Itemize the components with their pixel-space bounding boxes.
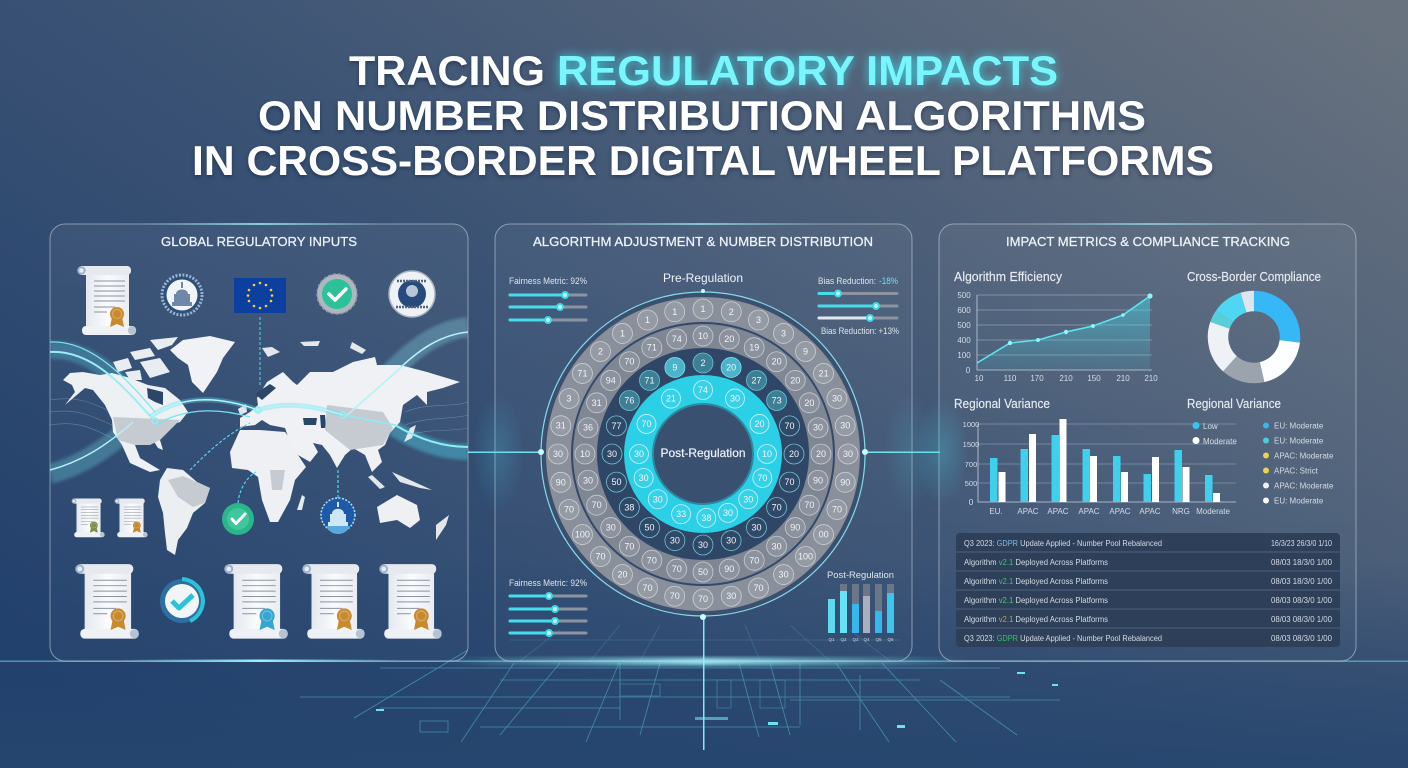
ring 1 numbers: 100 <box>575 530 590 540</box>
ring 2 numbers: 20 <box>772 357 782 367</box>
legend: regional variance: Regional Variance <box>1187 396 1281 411</box>
ring 2 numbers: 70 <box>672 564 682 574</box>
panel heading: GLOBAL REGULATORY INPUTS <box>161 234 357 249</box>
ring 4 numbers: 70 <box>757 473 767 483</box>
ring 2 numbers: 71 <box>647 343 657 353</box>
ring 3 numbers: 30 <box>726 536 736 546</box>
ring 3 numbers: 38 <box>624 502 634 512</box>
ring 3 numbers: 2 <box>700 358 706 368</box>
ring 4 numbers: 33 <box>676 509 686 519</box>
ring 3 numbers: 76 <box>624 396 634 406</box>
line chart: algorithm efficiency: 0 <box>966 366 971 375</box>
bar chart: regional variance: APAC <box>1047 507 1069 516</box>
icon: small scroll orange <box>115 499 148 537</box>
ring 1 numbers: 70 <box>753 583 763 593</box>
compliance log table: Algorithm v2.1 Deployed Across Platforms <box>964 576 1108 586</box>
ring 4 numbers: 21 <box>666 394 676 404</box>
icon: scroll with gold seal <box>77 266 136 335</box>
legend: low and moderate: Low <box>1203 422 1218 431</box>
ring 2 numbers: 10 <box>698 331 708 341</box>
panel heading: IMPACT METRICS & COMPLIANCE TRACKING <box>1006 234 1290 249</box>
sliders: fairness metric top: Fairness Metric: 92% <box>509 276 587 287</box>
ring 1 numbers: 2 <box>729 307 734 317</box>
ring 3 numbers: 50 <box>645 523 655 533</box>
compliance log table: Q3 2023: GDPR Update Applied - Number Pool Rebalanced <box>964 538 1162 548</box>
ring 1 numbers: 30 <box>553 449 563 459</box>
ring 4 numbers: 20 <box>755 419 765 429</box>
legend: regional variance <box>1187 396 1334 506</box>
donut chart: cross-border compliance: Cross-Border Compliance <box>1187 269 1321 284</box>
circuit grid floor <box>300 625 1060 742</box>
ring 1 numbers: 30 <box>840 421 850 431</box>
regulatory flow lines <box>50 317 468 503</box>
ring 4 numbers: 30 <box>723 508 733 518</box>
ring 2 numbers: 94 <box>606 375 616 385</box>
ring 3 numbers: 70 <box>772 502 782 512</box>
donut chart: cross-border compliance <box>1187 269 1321 388</box>
ring 1 numbers: 30 <box>726 591 736 601</box>
bar chart: regional variance: 700 <box>965 460 977 469</box>
post-regulation label: Post-Regulation <box>660 446 746 460</box>
ring 3 numbers: 20 <box>789 449 799 459</box>
sliders: fairness metric top <box>509 276 587 323</box>
mini bar chart: post-regulation: Q2 <box>840 637 847 642</box>
mini bar chart: post-regulation: Q4 <box>863 637 870 642</box>
icon: large check ring <box>160 579 204 623</box>
ring 2 numbers: 31 <box>592 398 602 408</box>
line chart: algorithm efficiency: 500 <box>957 291 971 300</box>
panel heading: ALGORITHM ADJUSTMENT & NUMBER DISTRIBUTION <box>533 234 873 249</box>
mini bar chart: post-regulation: Q1 <box>828 637 835 642</box>
ring 1 numbers: 30 <box>843 449 853 459</box>
ring 1 numbers: 30 <box>832 394 842 404</box>
icon: small scroll olive <box>72 499 105 537</box>
number wheel <box>541 292 865 616</box>
ring 4 numbers: 38 <box>701 513 711 523</box>
ring 2 numbers: 30 <box>606 523 616 533</box>
icon: institutional seal <box>389 271 435 317</box>
ring 1 numbers: 3 <box>781 328 786 338</box>
sliders: bias reduction: Bias Reduction: <box>818 276 876 287</box>
legend: regional variance: APAC: Moderate <box>1274 482 1334 490</box>
ring 1 numbers: 70 <box>595 552 605 562</box>
legend: regional variance: APAC: Moderate <box>1274 452 1334 460</box>
ring 2 numbers: 30 <box>772 541 782 551</box>
ring 1 numbers: 71 <box>577 368 587 378</box>
ring 3 numbers: 30 <box>607 449 617 459</box>
compliance log table: 08/03 08/3/0 1/00 <box>1271 614 1332 624</box>
legend: low and moderate: Moderate <box>1203 437 1237 446</box>
mini bar chart: post-regulation: Q5 <box>875 637 882 642</box>
legend: regional variance: APAC: Strict <box>1274 466 1319 476</box>
dark seas <box>255 384 326 428</box>
icon: capitol blue badge <box>321 498 355 534</box>
bar chart: regional variance: APAC <box>1139 507 1161 516</box>
ring 3 numbers: 30 <box>670 536 680 546</box>
legend: low and moderate <box>1192 422 1237 446</box>
ring 3 numbers: 20 <box>726 362 736 372</box>
compliance log table: 16/3/23 26/3/0 1/10 <box>1271 538 1332 548</box>
ring 1 numbers: 70 <box>698 594 708 604</box>
flow bands behind land <box>50 327 468 474</box>
line chart: algorithm efficiency: 170 <box>1030 374 1044 383</box>
ring 3 numbers: 71 <box>645 375 655 385</box>
bar chart: regional variance: 500 <box>965 479 977 488</box>
bar chart: regional variance: 1000 <box>963 420 979 429</box>
ring 1 numbers: 70 <box>670 591 680 601</box>
bar chart: regional variance: APAC <box>1078 507 1100 516</box>
wheel glow nodes <box>538 289 868 620</box>
ring 4 numbers: 30 <box>743 494 753 504</box>
ring 2 numbers: 70 <box>647 555 657 565</box>
line chart: algorithm efficiency: 210 <box>1144 374 1158 383</box>
ring 1 numbers: 70 <box>832 504 842 514</box>
ring 2 numbers: 90 <box>813 475 823 485</box>
world map <box>50 317 468 555</box>
line chart: algorithm efficiency <box>954 269 1158 383</box>
ring 1 numbers: 70 <box>643 583 653 593</box>
sliders: fairness metric bottom <box>509 578 587 636</box>
compliance log table: Algorithm v2.1 Deployed Across Platforms <box>964 557 1108 567</box>
ring 2 numbers: 70 <box>624 357 634 367</box>
ring 4 numbers: 74 <box>698 385 708 395</box>
ring 2 numbers: 30 <box>813 423 823 433</box>
icon: large scroll gold <box>75 564 139 639</box>
icon: EU flag <box>234 278 286 313</box>
ring 2 numbers: 20 <box>816 449 826 459</box>
ring 2 numbers: 70 <box>749 555 759 565</box>
ring 1 numbers: 3 <box>567 394 572 404</box>
line chart: algorithm efficiency: 210 <box>1059 374 1073 383</box>
ring 2 numbers: 20 <box>804 398 814 408</box>
ring 1 numbers: 70 <box>564 504 574 514</box>
ring 1 numbers: 3 <box>756 315 761 325</box>
ring 1 numbers: 00 <box>819 530 829 540</box>
icon: green check badge <box>317 274 357 314</box>
bar chart: regional variance: NRG <box>1172 507 1190 516</box>
ring 2 numbers <box>575 326 831 582</box>
title: ON NUMBER DISTRIBUTION ALGORITHMS <box>258 92 1146 139</box>
ring 2 numbers: 70 <box>624 541 634 551</box>
ring 4 numbers: 30 <box>639 473 649 483</box>
ring 2 numbers: 50 <box>698 567 708 577</box>
ring 2 numbers: 20 <box>724 334 734 344</box>
ring 2 numbers: 90 <box>724 564 734 574</box>
line chart: algorithm efficiency: 110 <box>1004 374 1017 383</box>
ring 4 numbers: 30 <box>730 394 740 404</box>
compliance log table: 08/03 18/3/0 1/00 <box>1271 557 1332 567</box>
ring 3 numbers: 27 <box>751 375 761 385</box>
line chart: algorithm efficiency: 150 <box>1087 374 1101 383</box>
icon: green check circle <box>222 503 254 535</box>
compliance log table: 08/03 08/3/0 1/00 <box>1271 595 1332 605</box>
line chart: algorithm efficiency: 600 <box>957 306 971 315</box>
ring 3 numbers: 70 <box>785 477 795 487</box>
ring 1 numbers: 30 <box>779 570 789 580</box>
ring 3 numbers: 70 <box>785 421 795 431</box>
title: REGULATORY IMPACTS <box>557 47 1058 94</box>
icon: large scroll amber 2 <box>379 564 442 639</box>
ring 1 numbers: 2 <box>598 346 603 356</box>
ring 1 numbers: 90 <box>840 477 850 487</box>
line chart: algorithm efficiency: 400 <box>957 336 971 345</box>
panel: impact metrics and compliance tracking <box>916 223 1356 661</box>
ring 1 numbers: 31 <box>556 421 566 431</box>
ring 3 numbers: 30 <box>751 523 761 533</box>
mini bar chart: post-regulation: Q3 <box>852 637 859 642</box>
icon: capitol seal <box>162 275 202 315</box>
ring 2 numbers: 70 <box>592 500 602 510</box>
ring 2 numbers: 74 <box>672 334 682 344</box>
compliance log table: 08/03 08/3/0 1/00 <box>1271 633 1332 643</box>
compliance log table <box>956 533 1340 647</box>
ring 4 numbers: 70 <box>641 419 651 429</box>
bar chart: regional variance: APAC <box>1109 507 1131 516</box>
line chart: algorithm efficiency: 10 <box>975 374 984 383</box>
icon: large scroll amber <box>302 564 365 639</box>
ring 1 numbers: 1 <box>700 304 706 314</box>
icon: large scroll blue seal <box>224 564 288 639</box>
bar chart: regional variance: APAC <box>1017 507 1039 516</box>
ring 3 numbers: 77 <box>611 421 621 431</box>
title <box>192 47 1214 184</box>
pre-regulation label: Pre-Regulation <box>663 271 743 285</box>
ring 1 numbers: 1 <box>645 315 650 325</box>
ring 2 numbers: 36 <box>583 423 593 433</box>
ring 3 numbers <box>602 353 804 555</box>
title: TRACING <box>349 47 545 94</box>
sliders: bias reduction <box>818 276 899 337</box>
ring 1 numbers: 100 <box>798 552 813 562</box>
ring 1 numbers <box>548 299 858 609</box>
sliders: bias reduction: -18% <box>879 276 898 287</box>
ring 2 numbers: 20 <box>790 375 800 385</box>
ring 3 numbers: 73 <box>772 396 782 406</box>
mini bar chart: post-regulation <box>827 570 894 642</box>
ring 2 numbers: 90 <box>790 523 800 533</box>
bar chart: regional variance <box>954 396 1236 516</box>
line chart: algorithm efficiency: 500 <box>957 321 971 330</box>
ring 4 numbers: 30 <box>634 449 644 459</box>
ring 3 numbers: 30 <box>698 540 708 550</box>
ring 4 numbers: 10 <box>762 449 772 459</box>
grey highlighted regions <box>113 405 393 507</box>
ring 2 numbers: 30 <box>583 475 593 485</box>
legend: regional variance: EU: Moderate <box>1274 496 1324 506</box>
ring 1 numbers: 90 <box>556 477 566 487</box>
legend: regional variance: EU: Moderate <box>1274 436 1324 446</box>
line chart: algorithm efficiency: Algorithm Efficiency <box>954 269 1062 284</box>
line chart: algorithm efficiency: 210 <box>1116 374 1130 383</box>
ring 4 numbers: 30 <box>653 494 663 504</box>
bar chart: regional variance: 0 <box>969 498 974 507</box>
line chart: algorithm efficiency: 100 <box>957 351 971 360</box>
ring 3 numbers: 50 <box>611 477 621 487</box>
connector lines <box>0 452 1408 665</box>
sliders: fairness metric bottom: Fairness Metric: 92% <box>509 578 587 589</box>
mini bar chart: post-regulation: Q6 <box>887 637 894 642</box>
sliders: bias reduction: Bias Reduction: +13% <box>821 326 899 337</box>
bar chart: regional variance: EU. <box>989 507 1003 516</box>
bar chart: regional variance: 1500 <box>963 440 979 449</box>
panel: algorithm adjustment and number distribution <box>472 223 936 661</box>
ring 1 numbers: 9 <box>803 346 808 356</box>
ring 2 numbers: 70 <box>804 500 814 510</box>
ring 2 numbers: 10 <box>580 449 590 459</box>
ring 1 numbers: 1 <box>672 307 677 317</box>
ring 4 numbers <box>630 380 776 527</box>
ring 2 numbers: 19 <box>749 343 759 353</box>
mini bar chart: post-regulation: Post-Regulation <box>827 570 894 581</box>
compliance log table: Algorithm v2.1 Deployed Across Platforms <box>964 614 1108 624</box>
ring 3 numbers: 9 <box>672 362 677 372</box>
panel: global regulatory inputs <box>50 223 468 662</box>
legend: regional variance: EU: Moderate <box>1274 422 1324 430</box>
ring 1 numbers: 20 <box>617 570 627 580</box>
compliance log table: 08/03 18/3/0 1/00 <box>1271 576 1332 586</box>
ring 1 numbers: 1 <box>620 328 625 338</box>
ring 1 numbers: 21 <box>819 368 829 378</box>
title: IN CROSS-BORDER DIGITAL WHEEL PLATFORMS <box>192 137 1214 184</box>
bar chart: regional variance: Regional Variance <box>954 396 1050 411</box>
bar chart: regional variance: Moderate <box>1196 507 1230 516</box>
compliance log table: Algorithm v2.1 Deployed Across Platforms <box>964 595 1108 605</box>
compliance log table: Q3 2023: GDPR Update Applied - Number Pool Rebalanced <box>964 633 1162 643</box>
